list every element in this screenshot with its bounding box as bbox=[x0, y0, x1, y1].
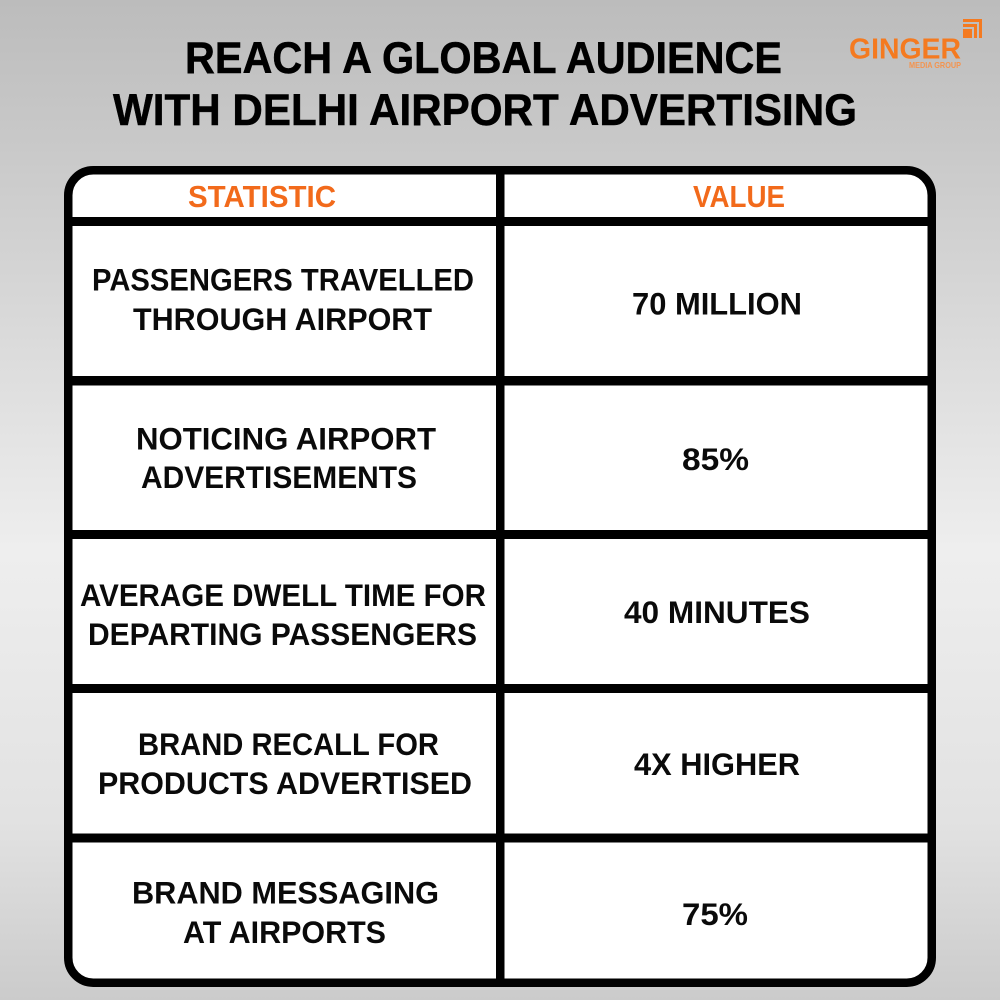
row: brand messaging: 75% bbox=[682, 896, 748, 932]
header row: STATISTIC bbox=[188, 180, 336, 214]
table background bbox=[68, 170, 932, 983]
row: brand recall: PRODUCTS ADVERTISED bbox=[98, 765, 472, 801]
logo: Ginger Media Group: MEDIA GROUP bbox=[909, 60, 961, 70]
title: REACH A GLOBAL AUDIENCE bbox=[185, 34, 782, 83]
table grid lines bbox=[64, 166, 936, 987]
row: dwell time: AVERAGE DWELL TIME FOR bbox=[80, 577, 486, 613]
row: brand messaging: BRAND MESSAGING bbox=[132, 874, 439, 910]
row: dwell time: DEPARTING PASSENGERS bbox=[88, 616, 477, 652]
row: noticing ads: NOTICING AIRPORT bbox=[136, 420, 436, 456]
row: noticing ads bbox=[136, 420, 749, 495]
row: passengers: 70 MILLION bbox=[632, 286, 802, 322]
table bbox=[64, 166, 936, 987]
row: passengers: THROUGH AIRPORT bbox=[133, 301, 432, 337]
row: noticing ads: ADVERTISEMENTS bbox=[141, 459, 417, 495]
icon: logo squares bbox=[963, 19, 982, 38]
row: brand recall: 4X HIGHER bbox=[634, 746, 800, 782]
row: brand recall bbox=[98, 726, 800, 801]
row: passengers: PASSENGERS TRAVELLED bbox=[92, 262, 474, 298]
row: passengers bbox=[92, 262, 802, 337]
header row bbox=[188, 180, 785, 214]
row: brand recall: BRAND RECALL FOR bbox=[138, 726, 439, 762]
header row: VALUE bbox=[693, 180, 785, 214]
row: dwell time: 40 MINUTES bbox=[624, 594, 810, 630]
title: WITH DELHI AIRPORT ADVERTISING bbox=[113, 86, 857, 135]
title bbox=[113, 34, 857, 135]
logo: Ginger Media Group: GINGER bbox=[849, 34, 961, 66]
logo: Ginger Media Group bbox=[849, 19, 982, 70]
row: dwell time bbox=[80, 577, 810, 652]
row: noticing ads: 85% bbox=[682, 441, 749, 477]
row: brand messaging bbox=[132, 874, 748, 950]
row: brand messaging: AT AIRPORTS bbox=[183, 914, 386, 950]
